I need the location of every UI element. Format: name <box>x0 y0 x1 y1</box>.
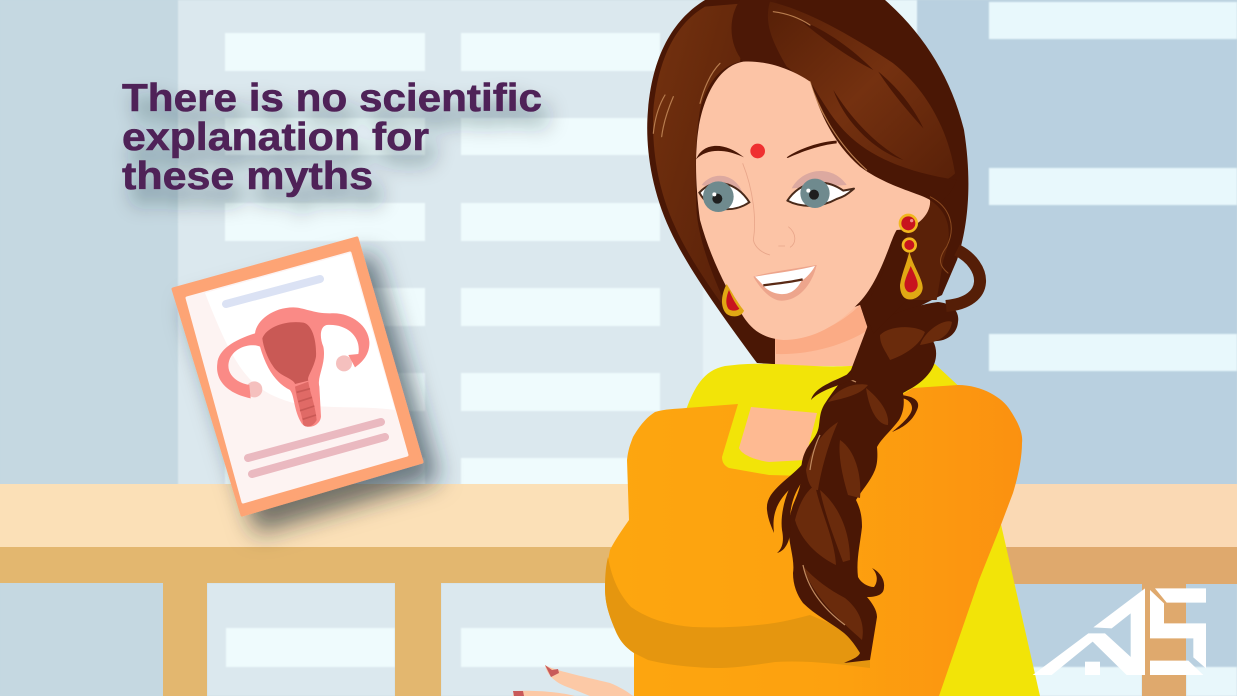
bindi <box>750 144 765 158</box>
card text lines <box>248 422 385 474</box>
arm shadow <box>605 557 870 668</box>
shirt: orange kurta <box>605 385 1022 696</box>
hair streaks <box>800 20 923 160</box>
mouth <box>753 265 817 301</box>
headline text: There is no scientific <box>122 77 542 120</box>
hand with fingers <box>513 665 633 696</box>
top: yellow kurta <box>686 364 1040 696</box>
braid strand highlights <box>795 321 952 640</box>
head <box>653 0 957 340</box>
face <box>696 61 930 340</box>
back hair <box>647 0 968 366</box>
left earring <box>722 284 744 316</box>
balcony railing <box>0 484 1237 696</box>
right earring <box>899 214 923 299</box>
woman character <box>513 0 1040 696</box>
card title bar <box>226 279 320 304</box>
eyebrows <box>696 146 744 159</box>
headline text: explanation for <box>122 116 429 159</box>
braid <box>767 250 980 663</box>
hair loop <box>946 250 980 306</box>
right eye <box>787 171 854 208</box>
icon: uterus <box>217 307 369 427</box>
left eye <box>699 176 749 212</box>
nose <box>743 163 795 255</box>
card: uterus diagram <box>173 238 422 515</box>
headline text <box>122 77 542 198</box>
neck <box>775 305 870 366</box>
logo: AS house mark <box>1033 588 1206 675</box>
headline text: these myths <box>122 155 373 198</box>
hair tones <box>653 3 743 320</box>
loose hair strands <box>767 372 918 553</box>
